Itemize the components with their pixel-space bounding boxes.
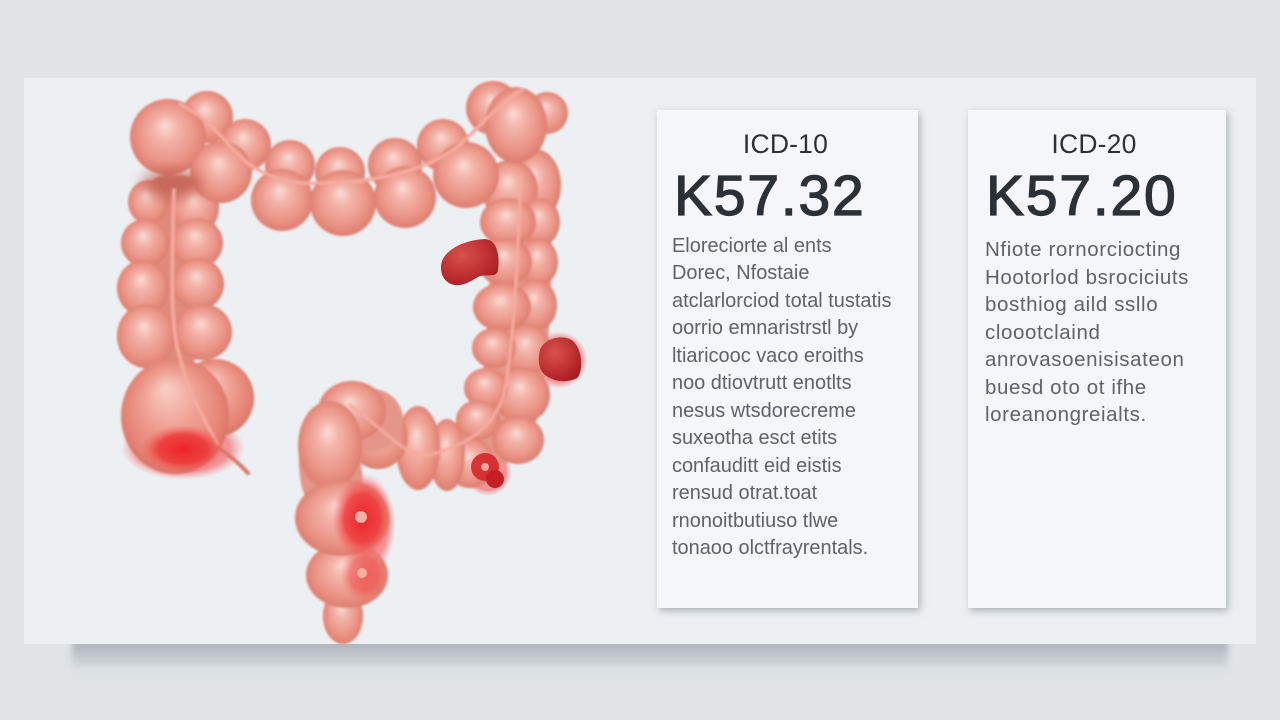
inflammation: rectum lower (340, 546, 388, 602)
caecum tail (218, 447, 248, 473)
caecum pouch (121, 358, 254, 474)
card description: Dorec, Nfostaie (672, 262, 809, 284)
card: K57.32 (657, 110, 918, 608)
card description: bosthiog aild ssllo (985, 293, 1158, 316)
card description: rensud otrat.toat (672, 482, 817, 504)
card description: Eloreciorte al ents (672, 235, 832, 257)
main panel (24, 78, 1256, 644)
red halos behind inflamed areas (121, 331, 588, 577)
sigmoid colon segments (298, 381, 495, 491)
card description: cloootclaind (985, 320, 1100, 344)
card description: atclarlorciod total tustatis (672, 290, 891, 312)
code: K57.32: K57.32 (674, 164, 865, 228)
card description: Nfiote rornorciocting (985, 238, 1181, 261)
diverticulum: middle red pouch (539, 337, 581, 381)
card description: suxeotha esct etits (672, 427, 837, 449)
card description: loreanongreialts. (985, 403, 1147, 426)
card heading: ICD-10: ICD-10 (743, 129, 828, 159)
code: K57.20: K57.20 (986, 164, 1177, 228)
descending colon segments (456, 92, 568, 464)
card description: ltiaricooc vaco eroiths (672, 345, 864, 367)
taenia stripe (172, 90, 522, 455)
inflammation: rectum upper (332, 478, 392, 558)
card description: confauditt eid eistis (672, 455, 842, 477)
rectum segments (295, 480, 389, 644)
card description (985, 238, 1189, 426)
diverticulum: lower red pouch (471, 453, 504, 488)
card description: nesus wtsdorecreme (672, 400, 856, 422)
card description: tonaoo olctfrayrentals. (672, 537, 868, 559)
ascending colon segments (117, 175, 232, 368)
panel shadow (72, 640, 1228, 672)
colon body (117, 81, 568, 644)
card description (672, 235, 891, 559)
shading under the hepatic flexure (142, 170, 202, 198)
transverse colon segments (130, 81, 547, 236)
card: K57.20 (968, 110, 1226, 608)
card description: rnonoitbutiuso tlwe (672, 510, 838, 532)
card description: noo dtiovtrutt enotlts (672, 372, 852, 394)
inflammation: caecum (141, 425, 225, 473)
diverticulum: upper red pouch (441, 239, 499, 285)
card description: buesd oto ot ifhe (985, 376, 1147, 398)
card description: anrovasoenisisateon (985, 348, 1184, 371)
card heading: ICD-20: ICD-20 (1051, 129, 1137, 159)
card description: Hootorlod bsrociciuts (985, 266, 1189, 288)
card description: oorrio emnaristrstl by (672, 317, 858, 339)
